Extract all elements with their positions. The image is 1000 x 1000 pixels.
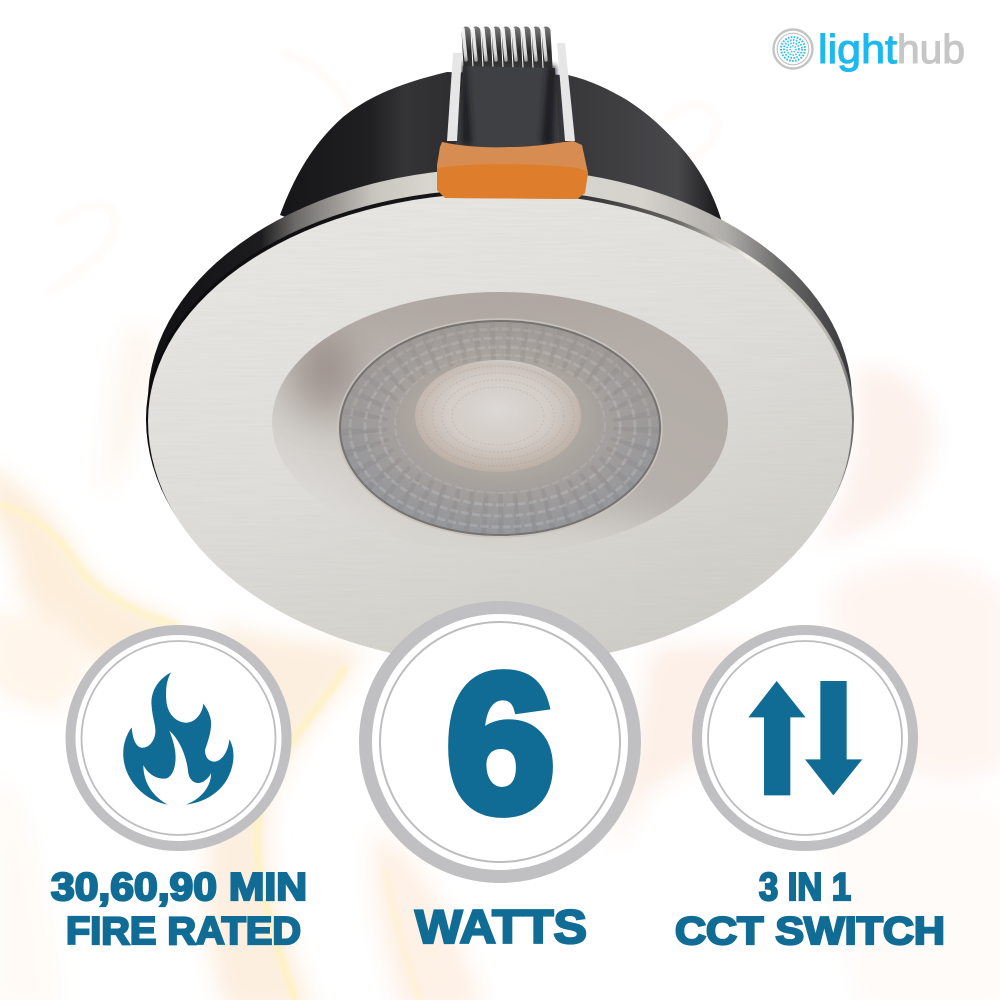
icon: flame [123,672,233,805]
black housing [280,72,722,300]
logo icon [774,30,812,68]
badge circle [70,630,286,846]
logo wordmark: light [818,26,898,72]
spring wires [447,43,575,141]
rim groove [146,189,854,660]
brushed metal texture [154,258,253,466]
label: 3 in 1 cct switch: 3 IN 1 [759,866,851,909]
big number 6: 6 [446,634,555,853]
outer rim [148,168,852,632]
clip wire shadows [462,62,556,145]
spring clip: coil [463,29,548,67]
recessed cone [272,292,728,537]
label: 30,60,90 min fire rated: FIRE RATED [66,910,301,953]
label: 3 in 1 cct switch [675,866,945,953]
label: watts: WATTS [415,900,587,953]
badge circle [366,608,634,876]
orange clip [437,141,588,199]
flange face [148,193,852,665]
badge: fire rated [51,630,307,953]
badge: cct switch [675,630,945,953]
optic lens [338,319,662,537]
label: 3 in 1 cct switch: CCT SWITCH [675,910,945,953]
logo wordmark: hub [897,26,965,72]
housing centre panel [455,66,560,150]
label: 30,60,90 min fire rated [51,866,307,953]
icon: up and down arrows [748,681,862,795]
central lens dome [415,355,581,472]
badge: 6 watts [366,608,634,953]
badge circle [697,630,913,846]
logo: lighthub [774,26,965,72]
downlight product [140,29,860,670]
label: 30,60,90 min fire rated: 30,60,90 MIN [51,866,307,909]
